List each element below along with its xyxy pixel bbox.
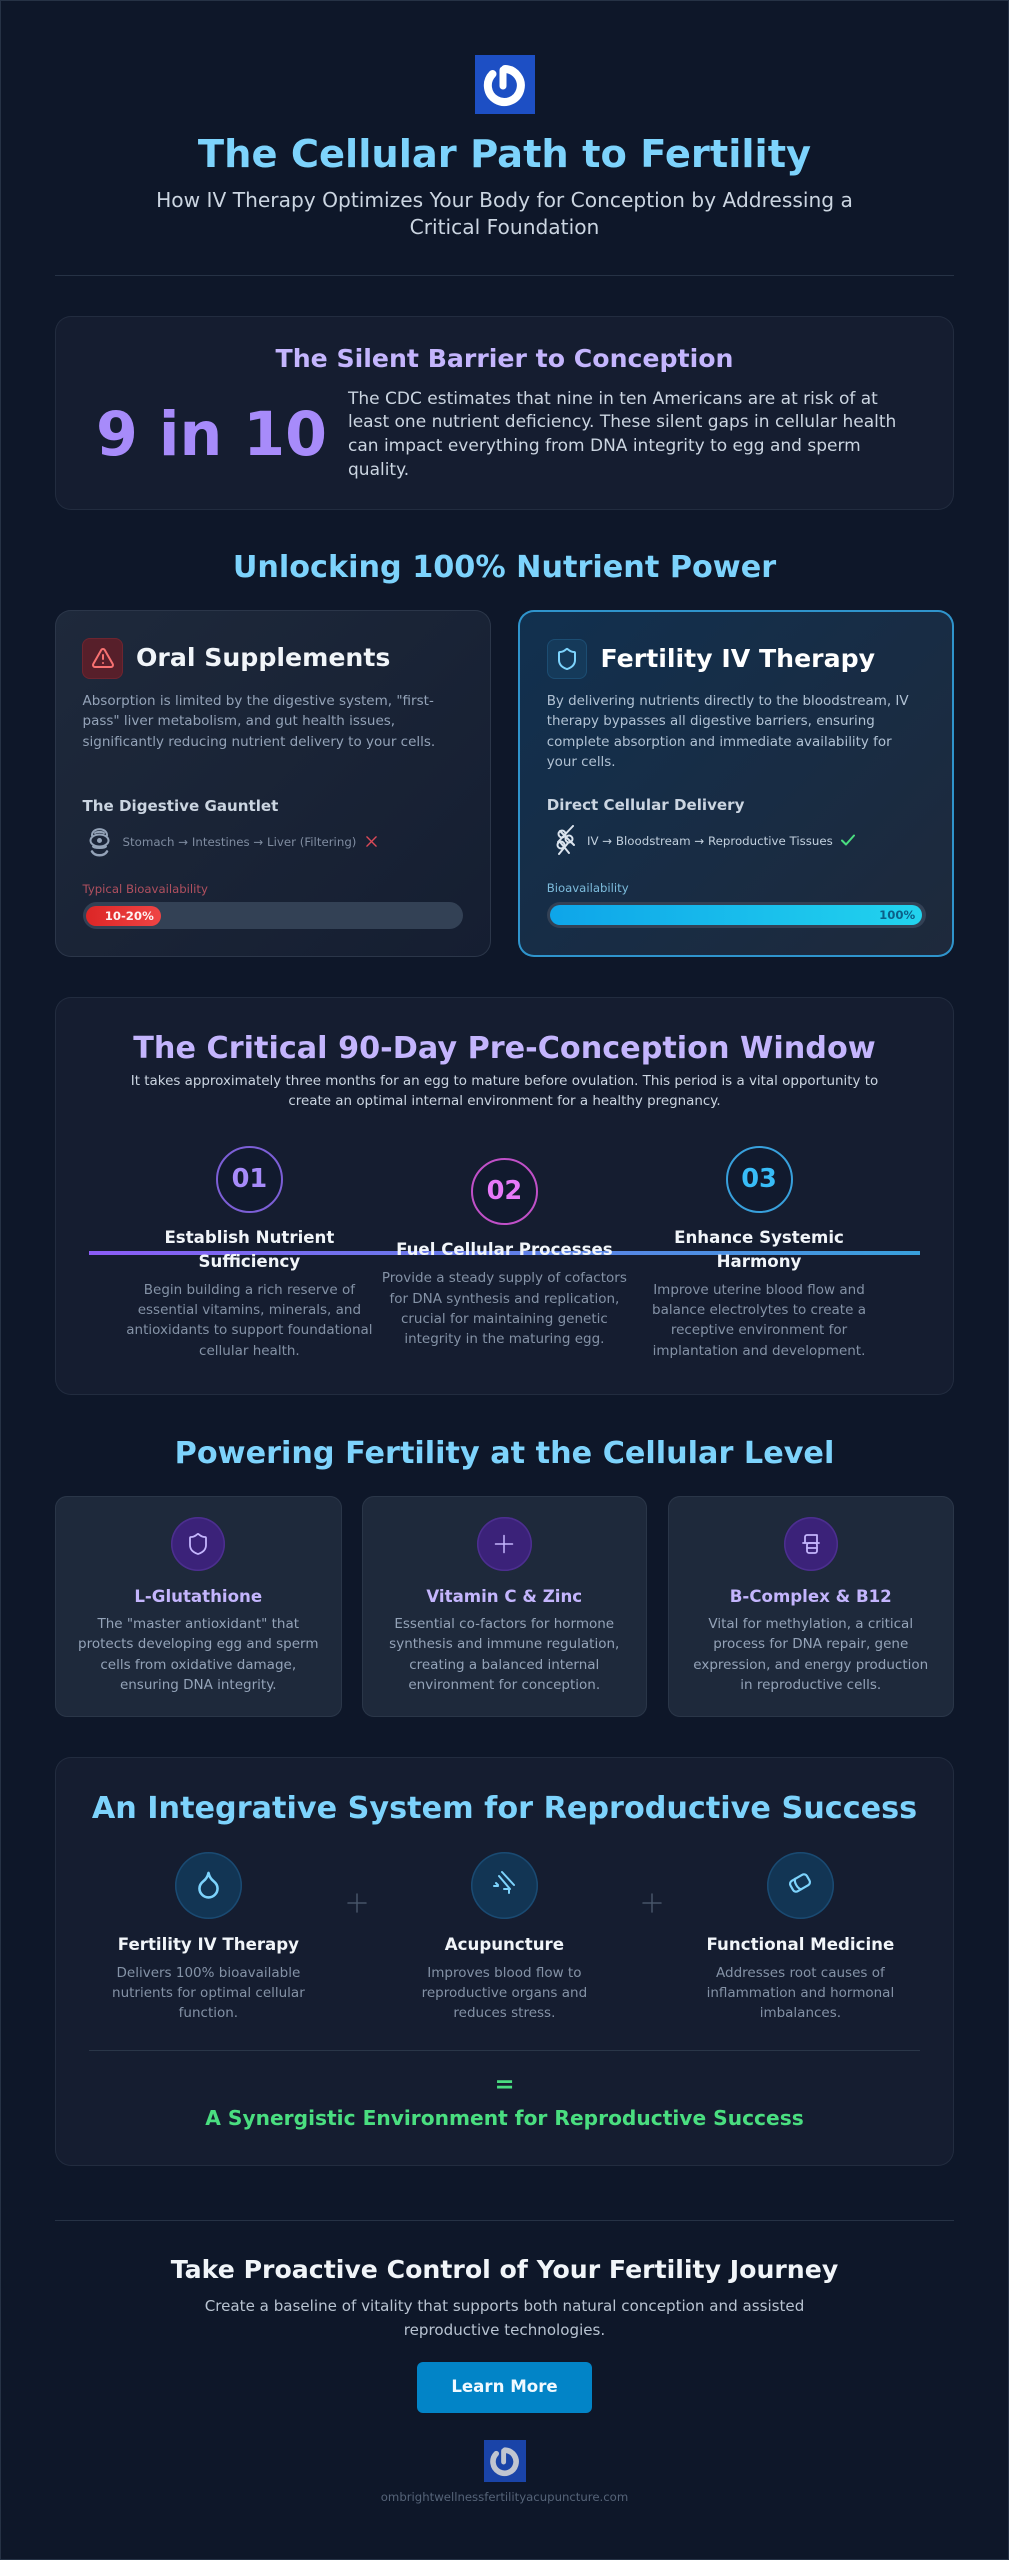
pillar: functional medicine [707, 1852, 894, 2021]
badge: 03 [726, 1146, 792, 1212]
text: IV description [547, 694, 909, 770]
button: learn more: Learn More [451, 2377, 558, 2396]
card title: L-Glutathione [134, 1587, 262, 1606]
value: 100%: 100% [879, 908, 915, 922]
label: bioavailability: Bioavailability [547, 880, 629, 894]
button: learn more [417, 2362, 592, 2413]
heading: integrative system: An Integrative System for Reproductive Success [92, 1790, 917, 1826]
pillar text: reproductive organs and [422, 1985, 587, 2001]
pillar title: Functional Medicine [707, 1935, 894, 1954]
card text [78, 1616, 318, 1693]
operator: plus [642, 1893, 662, 1913]
heading: nutrient power: Unlocking 100% Nutrient Power [233, 550, 776, 584]
text: CDC estimate [348, 389, 896, 480]
result statement: A Synergistic Environment for Reproductive Success [205, 2106, 804, 2130]
footer heading: Take Proactive Control of Your Fertility Journey [171, 2254, 838, 2284]
text: oral description: Absorption is limited by the digestive system, "first- [82, 693, 434, 709]
step title [164, 1228, 334, 1271]
step text: balance electrolytes to create a [652, 1302, 866, 1318]
text: 90-day intro [131, 1074, 878, 1109]
text: CDC estimate: least one nutrient deficiency. These silent gaps in cellular health [348, 412, 896, 432]
card text: expression, and energy production [693, 1657, 928, 1673]
subtitle: How IV Therapy Optimizes Your Body for Conception by Addressing a [156, 188, 853, 212]
operator: plus [347, 1893, 367, 1913]
badge: 02: 02 [487, 1176, 522, 1206]
step title: Harmony [717, 1252, 801, 1271]
pillar title: Acupuncture [445, 1935, 564, 1954]
pillar text [112, 1965, 305, 2021]
badge: 01: 01 [232, 1164, 267, 1194]
icon: shield [171, 1517, 225, 1571]
icon: capsule [784, 1517, 838, 1571]
step title: Enhance Systemic [674, 1228, 844, 1247]
card: Vitamin C and Zinc [362, 1496, 647, 1717]
icon: shield [547, 639, 587, 679]
step 2 [382, 1158, 627, 1347]
card title: Vitamin C & Zinc [426, 1587, 582, 1606]
step text: crucial for maintaining genetic [401, 1311, 608, 1327]
subheading: digestive gauntlet: The Digestive Gauntlet [82, 797, 278, 815]
step title: Establish Nutrient [164, 1228, 334, 1247]
card text: cells from oxidative damage, [100, 1657, 296, 1673]
step text: antioxidants to support foundational [126, 1322, 373, 1338]
footer url: ombrightwellnessfertilityacupuncture.com [381, 2490, 628, 2504]
value: 10-20%: 10-20% [105, 908, 154, 922]
pillar text: inflammation and hormonal [707, 1985, 894, 2001]
pillar text: function. [179, 2005, 238, 2021]
panel: fertility IV therapy [518, 610, 954, 957]
step text: cellular health. [199, 1343, 300, 1359]
subtitle [156, 188, 853, 238]
text: oral description: significantly reducing nutrient delivery to your cells. [82, 734, 435, 750]
step title [674, 1228, 844, 1271]
card text: in reproductive cells. [740, 1677, 881, 1693]
text: IV route: IV → Bloodstream → Reproductive Tissues [587, 834, 833, 848]
icon: check [841, 834, 855, 846]
footer text [205, 2297, 804, 2338]
label: typical bioavailability: Typical Bioavailability [82, 882, 208, 896]
footer text: reproductive technologies. [404, 2320, 605, 2338]
subtitle: Critical Foundation [410, 214, 599, 238]
step text: for DNA synthesis and replication, [389, 1290, 619, 1306]
text: CDC estimate: quality. [348, 460, 409, 480]
text: oral description: pass" liver metabolism, and gut health issues, [82, 713, 395, 729]
badge: 03: 03 [741, 1164, 777, 1194]
text: IV description: By delivering nutrients directly to the bloodstream, IV [547, 694, 909, 709]
card: L-Glutathione [55, 1496, 342, 1717]
step text [652, 1282, 866, 1359]
step title: Fuel Cellular Processes [396, 1240, 613, 1259]
heading: cellular level: Powering Fertility at the Cellular Level [175, 1436, 834, 1470]
text: 90-day intro: It takes approximately three months for an egg to mature before ovulation. This period is a vital opportunity to [131, 1074, 878, 1089]
text: 90-day intro: create an optimal internal environment for a healthy pregnancy. [288, 1094, 721, 1109]
heading: fertility IV therapy: Fertility IV Therapy [600, 644, 875, 673]
heading: 90-day window: The Critical 90-Day Pre-Conception Window [133, 1030, 876, 1066]
step text [126, 1282, 373, 1359]
card text: creating a balanced internal [409, 1657, 599, 1673]
badge: 01 [216, 1146, 283, 1212]
badge: 02 [471, 1158, 538, 1224]
card title: B-Complex & B12 [730, 1587, 892, 1606]
card text [389, 1616, 619, 1693]
equals sign: = [494, 2070, 515, 2098]
text: oral description [82, 693, 435, 750]
text: digestive route: Stomach → Intestines → Liver (Filtering) [122, 834, 356, 848]
bar: IV bioavailability [547, 902, 926, 928]
pillar text: Improves blood flow to [427, 1965, 581, 1981]
card text: ensuring DNA integrity. [120, 1677, 277, 1693]
text: CDC estimate: can impact everything from DNA integrity to egg and sperm [348, 436, 861, 456]
step text: Provide a steady supply of cofactors [382, 1270, 627, 1286]
footer text: Create a baseline of vitality that supports both natural conception and assisted [205, 2297, 804, 2315]
card: B-Complex and B12 [668, 1496, 954, 1717]
icon: plus [477, 1517, 532, 1571]
pillar text: nutrients for optimal cellular [112, 1985, 305, 2001]
step text: receptive environment for [671, 1322, 847, 1338]
pillar text: Delivers 100% bioavailable [116, 1965, 300, 1981]
panel: silent barrier [55, 316, 954, 510]
text: IV description: your cells. [547, 755, 616, 770]
pillar: fertility IV therapy [112, 1852, 305, 2021]
step title: Sufficiency [199, 1252, 300, 1271]
icon: stomach [90, 828, 110, 856]
step text [382, 1270, 627, 1347]
heading: oral supplements: Oral Supplements [136, 643, 390, 672]
card text: Vital for methylation, a critical [708, 1616, 913, 1632]
bar: oral bioavailability [82, 902, 463, 929]
heading: silent barrier: The Silent Barrier to Conception [276, 344, 733, 372]
pillar text [422, 1965, 587, 2021]
card text: protects developing egg and sperm [78, 1636, 318, 1652]
step 1 [126, 1146, 373, 1359]
subheading: direct cellular delivery: Direct Cellular Delivery [547, 796, 744, 814]
card text: Essential co-factors for hormone [394, 1616, 614, 1632]
step text: integrity in the maturing egg. [404, 1331, 604, 1347]
step 3 [652, 1146, 866, 1359]
text: CDC estimate: The CDC estimates that nine in ten Americans are at risk of at [348, 389, 878, 409]
pillar text: reduces stress. [453, 2005, 555, 2021]
card text: process for DNA repair, gene [713, 1636, 908, 1652]
card text: synthesis and immune regulation, [389, 1636, 619, 1652]
icon: needles [471, 1852, 538, 1919]
title: The Cellular Path to Fertility [198, 132, 811, 177]
panel: integrative system [55, 1757, 954, 2166]
icon: strand [556, 825, 575, 855]
text: IV description: complete absorption and immediate availability for [547, 735, 892, 750]
pillar text: Addresses root causes of [716, 1965, 885, 1981]
card text: The "master antioxidant" that [97, 1616, 299, 1632]
step text: implantation and development. [653, 1343, 865, 1359]
logo [474, 54, 534, 114]
pillar title: Fertility IV Therapy [118, 1935, 299, 1954]
step text: essential vitamins, minerals, and [138, 1302, 361, 1318]
pillar text: imbalances. [760, 2005, 841, 2021]
card text: environment for conception. [408, 1677, 600, 1693]
step text: Improve uterine blood flow and [653, 1282, 865, 1298]
panel: 90-day window [55, 997, 954, 1395]
card text [693, 1616, 928, 1693]
icon: cross [366, 836, 377, 847]
footer logo [484, 2440, 526, 2482]
timeline line [89, 1251, 920, 1255]
pillar text [707, 1965, 894, 2021]
step text: Begin building a rich reserve of [144, 1282, 355, 1298]
icon: warning [82, 638, 123, 678]
stat: 9 in 10: 9 in 10 [96, 400, 327, 470]
icon: droplet [175, 1852, 242, 1919]
icon: pill [767, 1852, 834, 1919]
panel: oral supplements [55, 610, 491, 957]
text: IV description: therapy bypasses all digestive barriers, ensuring [547, 714, 875, 729]
pillar: acupuncture [422, 1852, 587, 2021]
